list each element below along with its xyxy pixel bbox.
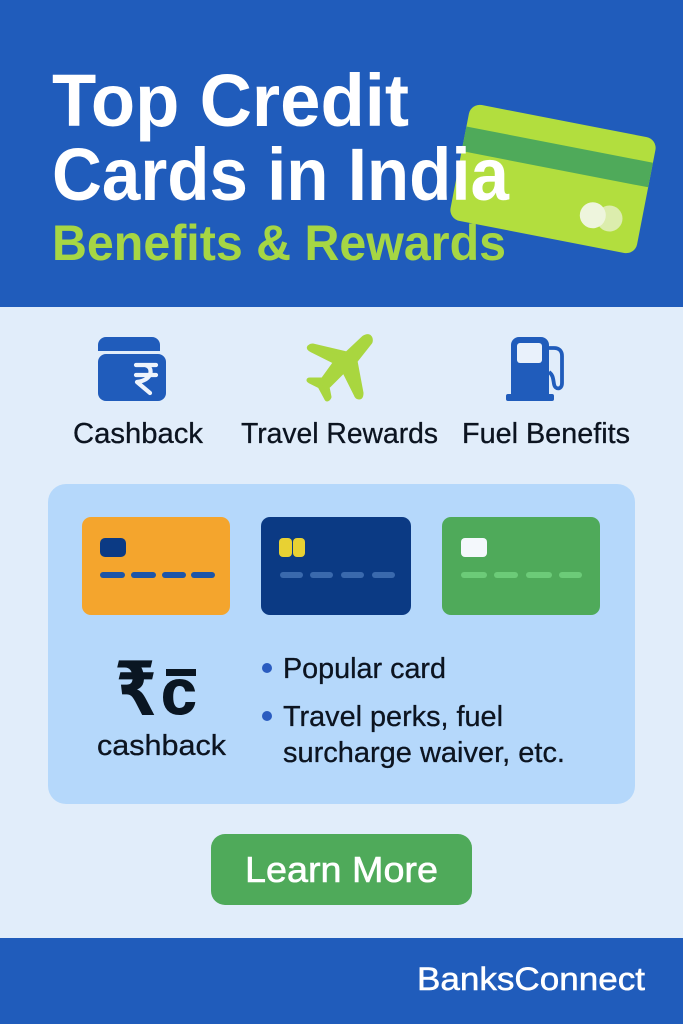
subtitle: Benefits & Rewards (52, 215, 506, 271)
button: learn more: Learn More (245, 849, 438, 890)
benefit: cashback (73, 337, 203, 450)
label: Cashback (73, 418, 203, 450)
title: Top Credit (52, 59, 409, 142)
benefit: travel rewards (241, 337, 438, 450)
header band (0, 0, 683, 307)
icon: tilted credit card (448, 103, 658, 255)
label: Travel Rewards (241, 418, 438, 450)
bullet list: surcharge waiver, etc. (283, 737, 565, 769)
icon: rupee wallet (98, 337, 166, 401)
bullet list (262, 653, 565, 769)
icon: airplane (309, 337, 370, 399)
title (52, 59, 510, 216)
card: navy (261, 517, 411, 615)
card: green (442, 517, 600, 615)
label: Fuel Benefits (462, 418, 630, 450)
cashback symbol (97, 647, 227, 762)
cashback symbol: ₹ (112, 647, 164, 731)
button: learn more (211, 834, 472, 905)
panel: card comparison (48, 484, 635, 804)
card: orange (82, 517, 230, 615)
brand name: BanksConnect (417, 961, 645, 997)
footer band (0, 938, 683, 1024)
title: Cards in India (52, 133, 510, 216)
benefit: fuel benefits (462, 337, 630, 450)
cashback caption: cashback (97, 730, 227, 762)
bullet list: Popular card (283, 653, 446, 685)
cashback symbol: c (161, 656, 197, 728)
bullet list: Travel perks, fuel (283, 701, 503, 733)
icon: fuel pump (506, 337, 562, 401)
